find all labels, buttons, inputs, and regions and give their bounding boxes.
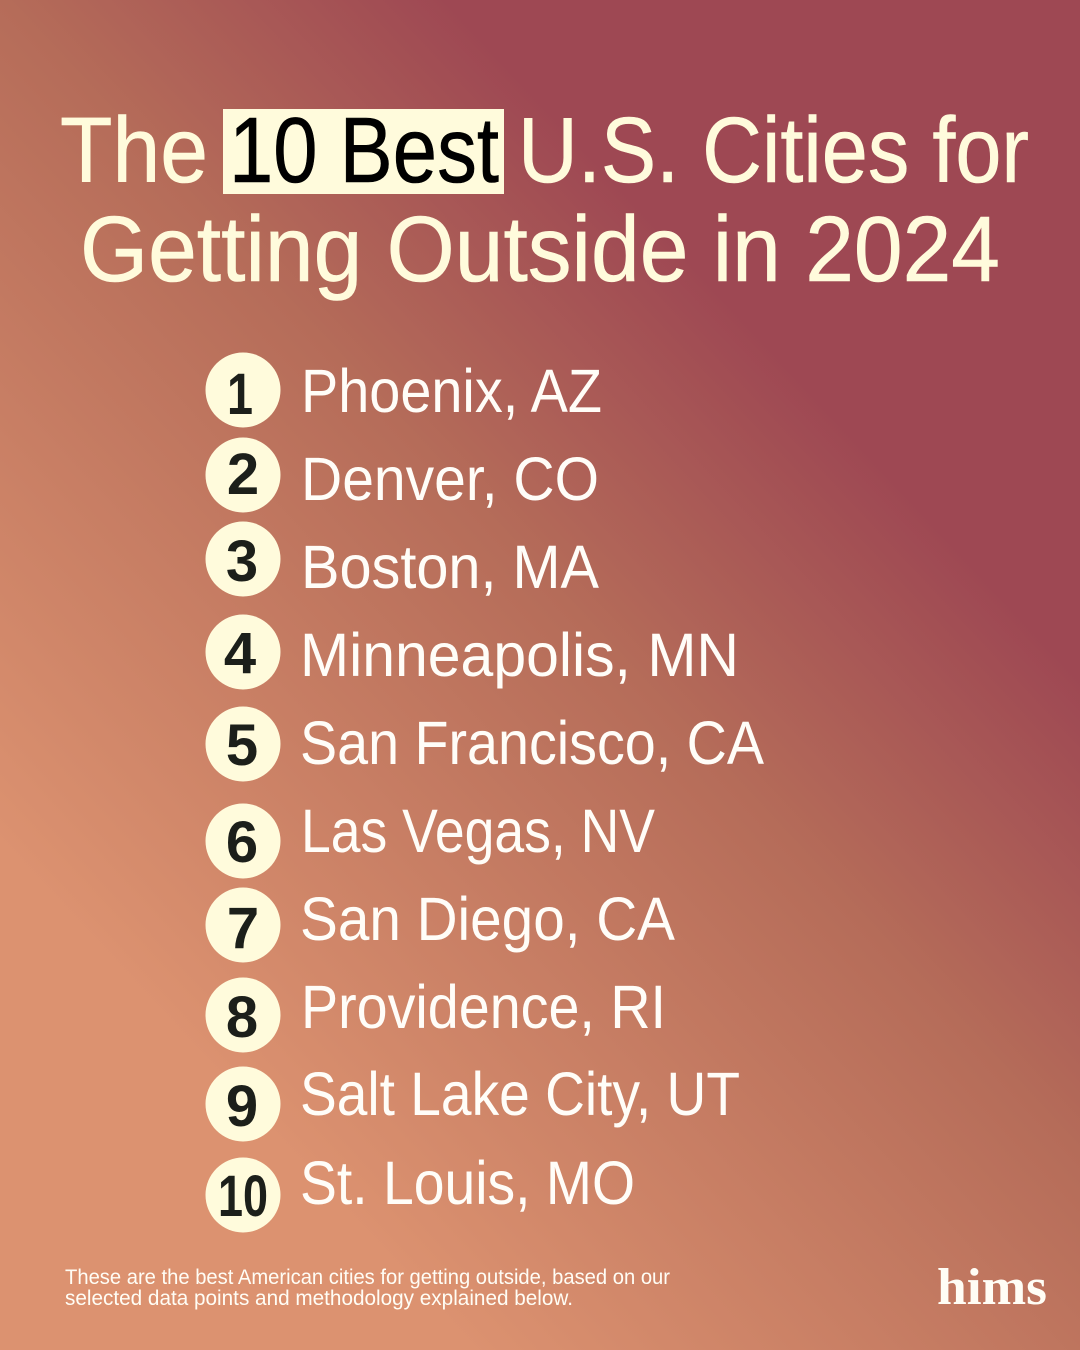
rank 10: St. Louis, MO	[300, 1149, 635, 1217]
footnote: selected data points and methodology explained below.	[65, 1287, 573, 1310]
rank 4: 4	[224, 621, 256, 686]
rank 8	[206, 973, 666, 1052]
title	[60, 98, 1029, 301]
title: The	[60, 98, 208, 202]
rank 1: 1	[227, 362, 253, 427]
title: U.S. Cities for	[518, 98, 1029, 202]
rank 2	[206, 438, 599, 513]
title highlight box	[223, 109, 504, 194]
title: 10 Best	[229, 98, 499, 202]
rank 8: Providence, RI	[301, 973, 666, 1041]
rank 5: San Francisco, CA	[300, 709, 764, 777]
rank 3: 3	[226, 529, 258, 594]
rank 3	[206, 522, 599, 601]
rank 9: 9	[226, 1074, 258, 1139]
ranking list	[206, 352, 764, 1232]
rank 3: Boston, MA	[301, 533, 599, 601]
rank 4: Minneapolis, MN	[300, 621, 739, 689]
rank 7: 7	[227, 896, 259, 961]
rank 1	[206, 352, 602, 428]
rank 6: Las Vegas, NV	[301, 797, 655, 865]
footnote: These are the best American cities for getting outside, based on our	[65, 1266, 670, 1289]
footnote	[65, 1266, 670, 1310]
title: Getting Outside in 2024	[80, 197, 1000, 301]
rank 2: 2	[227, 442, 259, 507]
rank 10: 10	[218, 1164, 268, 1229]
rank 8: 8	[226, 985, 258, 1050]
rank 7: San Diego, CA	[300, 885, 675, 953]
rank 10	[206, 1149, 635, 1232]
rank 6: 6	[226, 810, 258, 875]
logo: hims: hims	[937, 1259, 1047, 1316]
rank 7	[206, 885, 675, 962]
rank 9: Salt Lake City, UT	[300, 1060, 740, 1128]
rank 1: Phoenix, AZ	[301, 357, 602, 425]
rank 9	[206, 1060, 740, 1142]
rank 2: Denver, CO	[301, 445, 599, 513]
rank 6	[206, 797, 655, 878]
rank 5: 5	[226, 713, 258, 778]
